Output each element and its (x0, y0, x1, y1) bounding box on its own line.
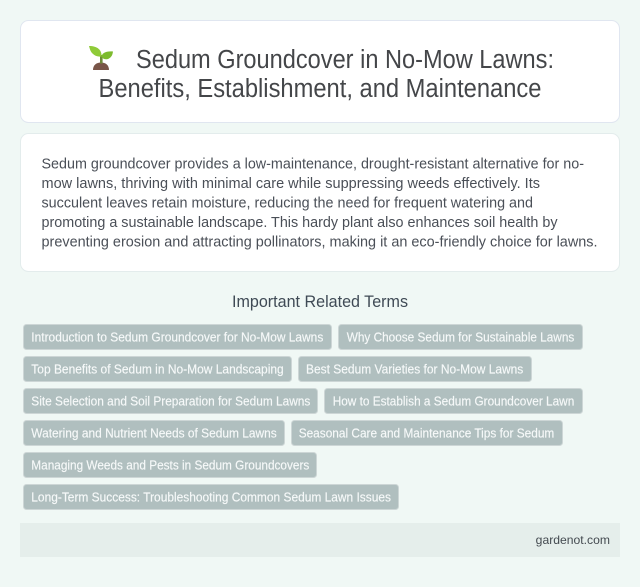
title (98, 46, 554, 103)
title: Benefits, Establishment, and Maintenance (98, 75, 542, 103)
tag: Why Choose Sedum for Sustainable Lawns (347, 330, 574, 344)
tag (24, 420, 284, 446)
icon: sprout (89, 46, 113, 70)
text block: description: succulent leaves retain moisture, reducing the need for frequent watering and (42, 194, 533, 211)
tag (24, 388, 318, 414)
tag (338, 324, 582, 350)
tag: Site Selection and Soil Preparation for Sedum Lawns (31, 394, 310, 408)
panel: title card (20, 20, 620, 122)
tag: How to Establish a Sedum Groundcover Lawn (333, 394, 574, 408)
tag (324, 388, 582, 414)
footer (20, 523, 620, 557)
panel: description (20, 134, 620, 272)
tag (24, 324, 332, 350)
text block: description (42, 155, 598, 250)
tag: Top Benefits of Sedum in No-Mow Landscaping (31, 362, 284, 376)
tag (24, 356, 292, 382)
tag (24, 452, 316, 478)
text block: description: mow lawns, thriving with minimal care while suppressing weeds effectively. Its (42, 175, 540, 192)
text block: description: preventing erosion and attracting pollinators, making it an eco-friendly choice for lawns. (42, 233, 598, 250)
tag: Seasonal Care and Maintenance Tips for Sedum (299, 426, 554, 440)
tag: Long-Term Success: Troubleshooting Common Sedum Lawn Issues (31, 490, 391, 504)
tag (24, 484, 398, 510)
title: Sedum Groundcover in No-Mow Lawns: (136, 46, 554, 74)
tag list (24, 324, 582, 510)
text block: description: promoting a sustainable landscape. This hardy plant also enhances soil health by (42, 214, 558, 231)
tag: Watering and Nutrient Needs of Sedum Lawns (31, 426, 277, 440)
tag: Best Sedum Varieties for No-Mow Lawns (306, 362, 523, 376)
tag: Managing Weeds and Pests in Sedum Groundcovers (31, 458, 309, 472)
text block: description: Sedum groundcover provides a low-maintenance, drought-resistant alternative for no- (42, 155, 584, 172)
tag (298, 356, 532, 382)
heading: related terms: Important Related Terms (232, 293, 408, 311)
footer: gardenot.com (536, 533, 610, 547)
tag: Introduction to Sedum Groundcover for No-Mow Lawns (31, 330, 323, 344)
tag (292, 420, 562, 446)
